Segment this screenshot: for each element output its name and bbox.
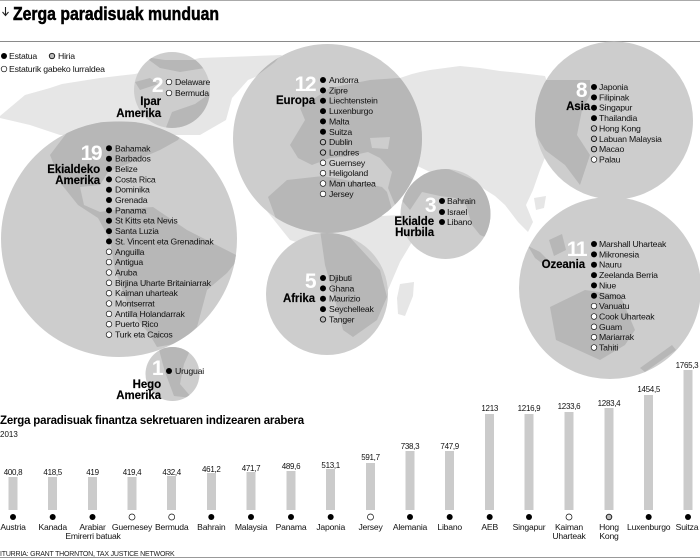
panel: Ekialdeko Amerika: Antilla Holandarrak [115,309,185,319]
panel: Europa: Londres [329,148,360,158]
panel: Europa [233,44,425,240]
panel: Ekialde Hurbila: Bahrain [447,196,476,206]
panel: Ekialdeko Amerika: Santa Luzia [115,226,159,236]
panel: Hego Amerika: Uruguai [175,366,204,376]
legend: Hiria [58,51,75,61]
panel: Ekialdeko Amerika: St Kitts eta Nevis [115,216,178,226]
bar chart: Emirerri batuak [65,531,122,541]
panel: Europa: Zipre [329,85,348,95]
bar chart: Alemania [393,522,428,532]
panel: Europa: Dublin [329,137,353,147]
bar chart: 419,4 [123,468,142,477]
panel: Afrika [266,230,388,355]
source note: ITURRIA: GRANT THORNTON, TAX JUSTICE NETWORK [0,551,175,558]
panel: Europa: Europa [276,95,316,107]
panel: Asia: Asia [566,101,591,113]
bar chart: Japonia [316,522,345,532]
chart heading [0,415,305,439]
panel: Ekialdeko Amerika: Amerika [55,175,101,187]
panel: Ekialdeko Amerika: Panama [115,205,147,215]
panel: Europa: Suitza [329,127,352,137]
bar chart: 513,1 [321,461,341,470]
panel: Asia: Japonia [599,82,628,92]
bar chart: Kaiman [555,522,583,532]
panel: Ozeania: Guam [599,322,622,332]
panel: Europa: Heligoland [329,168,368,178]
panel: Afrika: Seychelleak [329,304,375,314]
panel: Ekialdeko Amerika: Puerto Rico [115,319,159,329]
panel: Europa: Luxenburgo [329,106,373,116]
panel: Afrika: Tanger [329,314,355,324]
bar chart: 461,2 [202,465,221,474]
chart heading: 2013 [0,430,18,439]
panel: Afrika: Djibuti [329,273,352,283]
bar chart: Arabiar [79,522,106,532]
world map background [0,55,560,316]
panel: Europa: Jersey [329,189,354,199]
panel: Ekialde Hurbila: Israel [447,207,467,217]
bar chart [0,361,699,541]
bar chart: Singapur [513,522,546,532]
panel: Ekialdeko Amerika: 19 [81,142,102,165]
panel: Ekialdeko Amerika: Turk eta Caicos [115,330,173,340]
panel: Asia: Macao [599,144,624,154]
panel: Asia: Palau [599,154,621,164]
bar chart: 471,7 [242,464,261,473]
bar chart: 400,8 [4,468,23,477]
panel: Ekialdeko Amerika: Aruba [115,268,138,278]
panel: Hego Amerika: Hego [133,379,161,391]
panel: Ekialdeko Amerika: Kaiman uharteak [115,288,179,298]
panel: Ekialdeko Amerika: St. Vincent eta Grenadinak [115,236,214,246]
panel: Ozeania: 11 [567,238,588,261]
chart heading: Zerga paradisuak finantza sekretuaren indizearen arabera [0,415,305,427]
bar chart: 1283,4 [598,399,621,408]
bar chart: 591,7 [361,453,381,462]
bar chart: 1213 [481,404,499,413]
panel: Ekialdeko Amerika: Birjina Uharte Britainiarrak [115,278,212,288]
legend: Estatua [9,51,37,61]
panel: Ekialde Hurbila: Ekialde [394,216,434,228]
panel: Ipar Amerika: Bermuda [175,88,209,98]
panel: Hego Amerika: Amerika [116,390,162,402]
panel: Ozeania: Mikronesia [599,249,639,259]
panel: Ipar Amerika: Delaware [175,77,210,87]
panel: Ekialdeko Amerika: Anguilla [115,247,145,257]
bar chart: Kanada [38,522,67,532]
bar chart: Malaysia [235,522,268,532]
panel: Ozeania: Mariarrak [599,332,635,342]
panel: Asia: Hong Kong [599,123,641,133]
bar chart: Suitza [676,522,699,532]
panel: Ozeania: Nauru [599,260,622,270]
panel: Afrika: Maurizio [329,294,361,304]
panel: Ozeania: Vanuatu [599,301,630,311]
bar chart: Uharteak [552,531,587,541]
panel: Europa: 12 [295,73,316,96]
bar chart: 1233,6 [558,402,581,411]
panel: Ozeania: Samoa [599,291,626,301]
bar chart: 1454,5 [637,385,661,394]
panel: Ekialdeko Amerika: Belize [115,164,138,174]
bar chart: 1765,3 [676,361,699,370]
panel: Ipar Amerika [116,52,212,130]
panel: Asia: Filipinak [599,92,630,102]
bar chart: Hong [599,522,619,532]
panel: Ozeania: Niue [599,280,616,290]
panel: Ekialdeko Amerika: Dominika [115,185,150,195]
bar chart: 1216,9 [518,404,541,413]
bar chart: Luxenburgo [627,522,671,532]
panel: Ekialdeko Amerika: Grenada [115,195,148,205]
panel: Europa: Man uhartea [329,178,376,188]
bar chart: Guernesey [112,522,153,532]
panel: Europa: Guernsey [329,158,366,168]
panel: Ekialdeko Amerika: Ekialdeko [47,164,100,176]
panel: Ekialde Hurbila: 3 [425,194,436,217]
bar chart: Kong [599,531,619,541]
panel: Afrika: Afrika [283,293,316,305]
bar chart: Bermuda [155,522,189,532]
panel: Asia: Labuan Malaysia [599,134,662,144]
panel: Hego Amerika: 1 [152,357,164,380]
panel: Ozeania: Marshall Uharteak [599,239,667,249]
panel: Ekialde Hurbila [394,165,492,259]
bar chart: Austria [0,522,26,532]
panel: Ekialdeko Amerika: Barbados [115,154,151,164]
bar chart: 432,4 [162,468,182,477]
panel: Ekialdeko Amerika: Montserrat [115,298,155,308]
panel: Ipar Amerika: 2 [152,74,163,97]
panel: Europa: Malta [329,116,350,126]
bar chart: 738,3 [401,442,420,451]
panel: Ekialde Hurbila: Hurbila [395,227,435,239]
panel: Ipar Amerika: Amerika [116,108,162,120]
legend: Estaturik gabeko lurraldea [9,64,105,74]
bar chart: 489,6 [282,462,301,471]
panel: Ozeania: Ozeania [542,259,586,271]
panel: Afrika: Ghana [329,283,354,293]
bar chart: Panama [276,522,307,532]
panel: Ekialdeko Amerika: Costa Rica [115,174,156,184]
bar chart: 419 [86,468,100,477]
panel: Afrika: 5 [305,270,317,293]
panel: Asia: 8 [576,79,588,102]
bar chart: Jersey [358,522,383,532]
panel: Asia [530,42,693,200]
panel: Europa: Andorra [329,75,359,85]
bar chart: 747,9 [440,442,460,451]
panel: Asia: Singapur [599,103,632,113]
panel: Ekialdeko Amerika: Antigua [115,257,143,267]
panel: Ozeania: Cook Uharteak [599,312,655,322]
bar chart: Libano [437,522,462,532]
panel: Europa: Liechtenstein [329,96,378,106]
legend [1,51,105,74]
bar chart: AEB [481,522,498,532]
title with arrow: Zerga paradisuak munduan [13,4,219,24]
panel: Ekialdeko Amerika [1,121,240,357]
bar chart: Bahrain [197,522,226,532]
bar chart: 418,5 [43,468,63,477]
panel: Ozeania [519,197,700,379]
panel: Ipar Amerika: Ipar [140,96,162,108]
panel: Ozeania: Zeelanda Berria [599,270,658,280]
panel: Ekialde Hurbila: Libano [447,217,472,227]
panel: Ozeania: Tahiti [599,342,618,352]
panel: Asia: Thailandia [599,113,637,123]
panel: Ekialdeko Amerika: Bahamak [115,143,151,153]
panel: Hego Amerika [116,346,204,402]
